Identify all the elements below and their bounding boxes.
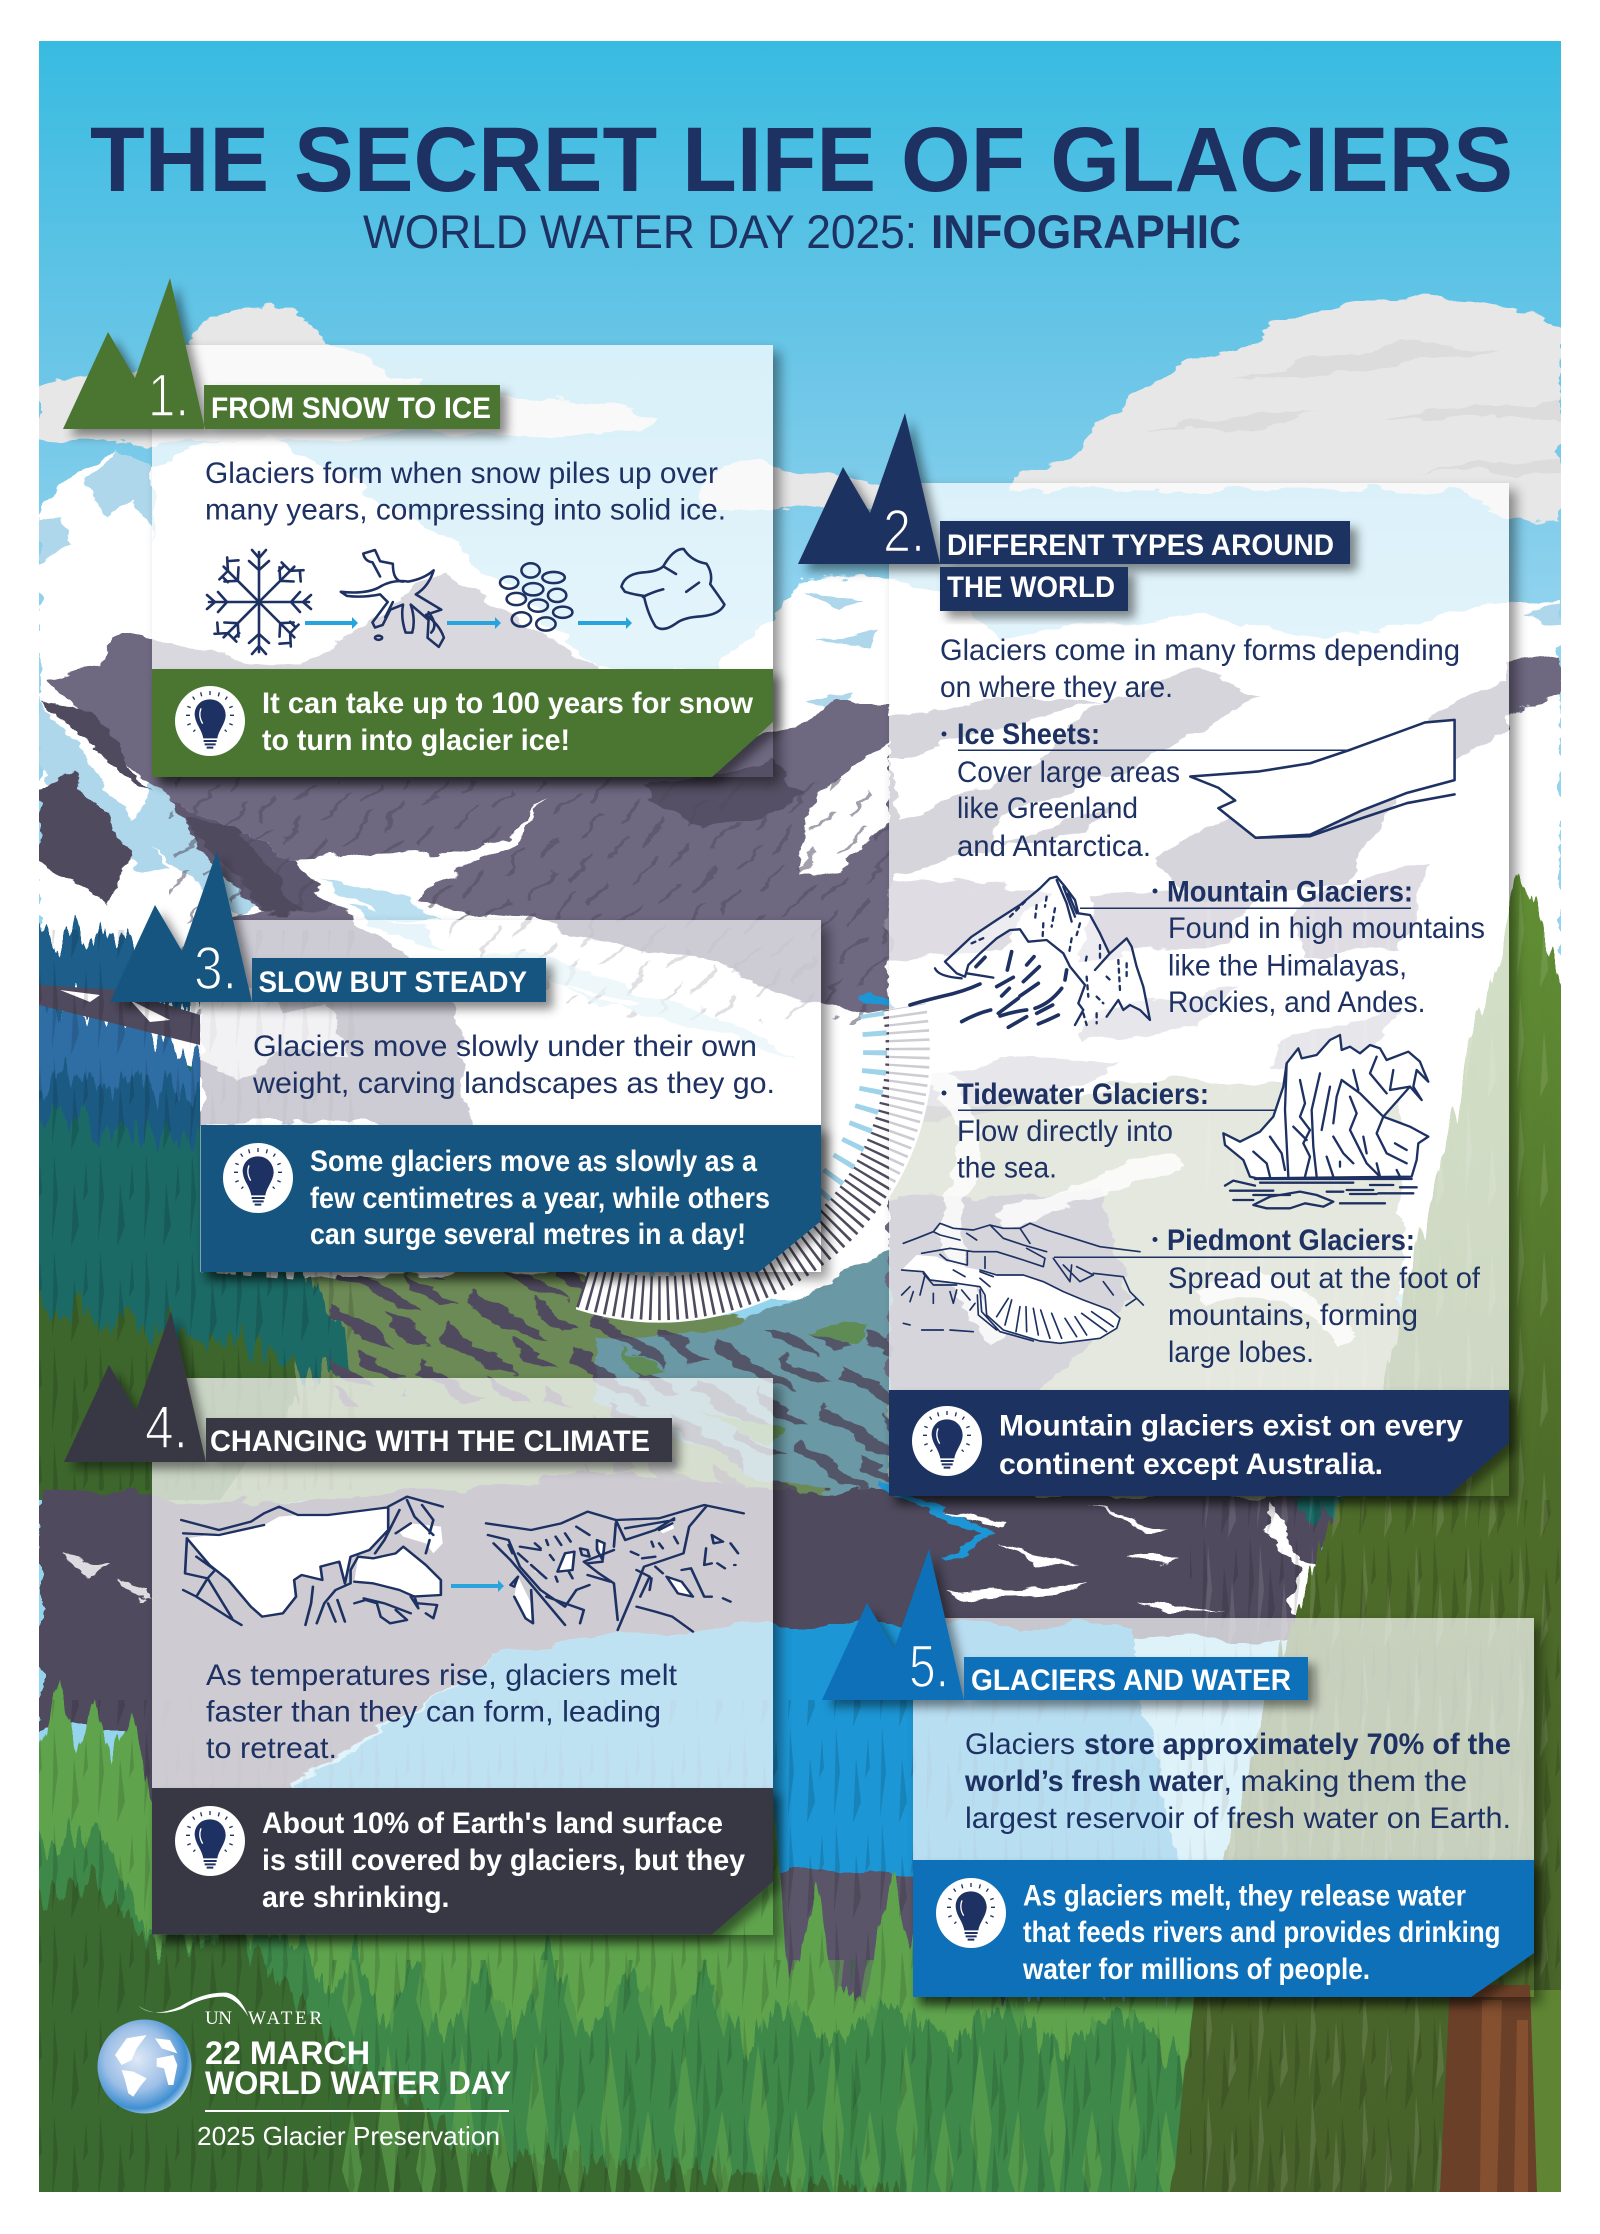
text: mountain glaciers: Found in high mountains [1168, 912, 1485, 945]
heading: section 3 [110, 851, 546, 1002]
arrow [305, 617, 358, 629]
panel: different types [798, 413, 1516, 1503]
icon: piedmont glacier [902, 1223, 1143, 1343]
title: THE SECRET LIFE OF GLACIERS [90, 109, 1513, 211]
tip text: About 10% of Earth's land surface [262, 1807, 723, 1840]
icon: mountain glacier [910, 877, 1150, 1027]
text: theme: 2025 Glacier Preservation [197, 2121, 500, 2151]
text: section 3 body: weight, carving landscapes as they go. [252, 1067, 775, 1100]
icon: firn flake [341, 550, 444, 647]
tip text: It can take up to 100 years for snow [262, 687, 754, 720]
tip band [889, 1390, 1509, 1496]
icon: globe [98, 2020, 192, 2114]
tip text [999, 1410, 1463, 1481]
icon: snowflake [207, 550, 311, 654]
logo: UN Water world water day [98, 1993, 511, 2151]
panel: changing with the climate [64, 1311, 780, 1942]
text: section 4 body [206, 1659, 678, 1765]
arrow [578, 617, 632, 629]
text: section 5 body: , making them the [1224, 1765, 1467, 1798]
heading: section 4 [64, 1311, 672, 1462]
lake [275, 1625, 1180, 1900]
tree trunk [1440, 1985, 1537, 2192]
blue forests [39, 922, 200, 1005]
icon: granules [500, 563, 572, 631]
dark rock [39, 1470, 1340, 1785]
heading: section 1: FROM SNOW TO ICE [211, 392, 491, 425]
teal forest [39, 1105, 350, 1370]
tip text: are shrinking. [262, 1881, 450, 1914]
big tree [1160, 875, 1561, 2234]
tip text [1022, 1880, 1500, 1986]
tip text: is still covered by glaciers, but they [262, 1844, 745, 1877]
heading: section 5: GLACIERS AND WATER [971, 1664, 1291, 1697]
icon: lightbulb [936, 1878, 1006, 1948]
text: tidewater glaciers: Flow directly into [957, 1115, 1173, 1148]
arrow [447, 617, 501, 629]
forest base [39, 1010, 340, 1330]
tip text: water for millions of people. [1022, 1953, 1370, 1986]
icon: ice chunk [621, 549, 724, 629]
valley and green slopes [167, 1272, 832, 1506]
tip text: to turn into glacier ice! [262, 724, 570, 757]
tip text: As glaciers melt, they release water [1023, 1880, 1466, 1912]
tip text: can surge several metres in a day! [310, 1218, 746, 1251]
heading: section 2: THE WORLD [947, 571, 1115, 604]
heading: section 4: 4. [145, 1394, 188, 1461]
text: section 1 body: many years, compressing into solid ice. [205, 494, 726, 526]
rock strokes over valley [330, 1272, 630, 1402]
icon: lightbulb [223, 1143, 293, 1213]
glacier terminal fan [579, 1004, 922, 1312]
text: piedmont glaciers: mountains, forming [1168, 1299, 1418, 1332]
tip text [262, 687, 754, 757]
text: piedmont glaciers: Spread out at the foot of [1168, 1262, 1481, 1295]
glacier [298, 798, 632, 1022]
icon: lightbulb [912, 1406, 982, 1476]
lower left rock [39, 1600, 510, 1840]
text: section 5 body: Glaciers [965, 1728, 1075, 1761]
icon: tidewater glacier [1223, 1035, 1428, 1208]
text: ice sheets: Ice Sheets: [957, 718, 1100, 751]
panel: slow but steady [110, 851, 828, 1279]
text: section 2 intro: on where they are. [940, 671, 1173, 704]
text: tidewater glaciers [942, 1078, 1280, 1184]
tip text [262, 1807, 745, 1914]
tip text [310, 1145, 770, 1251]
moraine teal-grey [590, 1250, 889, 1500]
tip band [152, 669, 773, 777]
text: section 3 body: Glaciers move slowly under their own [253, 1030, 757, 1063]
heading: section 1 [63, 278, 500, 429]
text: section 2 intro: Glaciers come in many forms depending [940, 634, 1460, 667]
text: piedmont glaciers: large lobes. [1168, 1336, 1314, 1369]
tip band [200, 1125, 821, 1272]
text: section 4 body: faster than they can form, leading [206, 1696, 661, 1728]
dark green forest [39, 1300, 300, 1490]
text: ice sheets: and Antarctica. [957, 830, 1151, 863]
icon: ice sheet [1190, 720, 1455, 838]
tip band [152, 1788, 773, 1934]
text: mountain glaciers: Rockies, and Andes. [1168, 986, 1426, 1019]
icon: glacier map after [486, 1505, 744, 1632]
text: section 1 body [205, 457, 726, 526]
text: mountain glaciers: Mountain Glaciers: [1167, 876, 1413, 908]
heading: section 5 [822, 1549, 1308, 1700]
heading: section 2 [798, 413, 1350, 611]
text: mountain glaciers [1080, 876, 1485, 1019]
text: tidewater glaciers: Tidewater Glaciers: [957, 1078, 1209, 1111]
text: ice sheets [942, 718, 1351, 863]
text: section 5 body: largest reservoir of fresh water on Earth. [965, 1802, 1511, 1835]
text: section 4 body: to retreat. [206, 1732, 337, 1765]
icon: lightbulb [175, 1806, 245, 1876]
panel: glaciers and water [822, 1549, 1541, 2004]
text: piedmont glaciers: Piedmont Glaciers: [1167, 1224, 1415, 1257]
subtitle: WORLD WATER DAY 2025: [363, 205, 917, 258]
text: section 3 body [252, 1030, 775, 1100]
heading: section 2: DIFFERENT TYPES AROUND [947, 529, 1334, 562]
text: ice sheets: like Greenland [957, 792, 1138, 825]
text: section 2 intro [940, 634, 1460, 704]
heading: section 2: 2. [883, 498, 925, 564]
text: UN Water: WATER [248, 2008, 322, 2029]
forest [39, 1680, 1194, 2192]
panel: from snow to ice [63, 278, 780, 784]
icon: glacier map before [181, 1497, 443, 1625]
text: UN Water: UN [205, 2008, 232, 2029]
tip text: Some glaciers move as slowly as a [310, 1145, 757, 1178]
text: section 4 body: As temperatures rise, glaciers melt [206, 1659, 678, 1692]
text: UN Water [205, 2008, 322, 2029]
heading: section 1: 1. [148, 362, 189, 429]
purple rock [46, 571, 889, 1020]
heading: section 3: 3. [194, 935, 237, 1002]
text: section 5 body: store approximately 70% of the [1084, 1728, 1511, 1761]
tip text: continent except Australia. [999, 1448, 1383, 1481]
tip text: that feeds rivers and provides drinking [1023, 1916, 1500, 1949]
tip band [913, 1860, 1534, 1997]
text: tidewater glaciers: the sea. [957, 1152, 1057, 1184]
subtitle: INFOGRAPHIC [931, 205, 1241, 258]
subtitle [363, 205, 1241, 258]
clouds [39, 298, 1561, 522]
heading: section 4: CHANGING WITH THE CLIMATE [210, 1425, 650, 1458]
river [876, 1483, 989, 1563]
tip text: Mountain glaciers exist on every [999, 1410, 1463, 1442]
text: section 5 body [964, 1728, 1511, 1835]
arrow [451, 1580, 504, 1592]
text: piedmont glaciers [1054, 1224, 1481, 1369]
text: world water day: WORLD WATER DAY [205, 2065, 511, 2101]
tip text: few centimetres a year, while others [310, 1182, 770, 1215]
heading: section 3: SLOW BUT STEADY [258, 966, 527, 999]
snow mountains [39, 435, 1561, 1300]
text: ice sheets: Cover large areas [957, 756, 1180, 789]
heading: section 5: 5. [909, 1633, 949, 1700]
text: section 5 body: world’s fresh water [964, 1765, 1224, 1798]
icon: lightbulb [175, 686, 245, 756]
icon: swoosh [138, 1993, 248, 2017]
text: section 1 body: Glaciers form when snow piles up over [205, 457, 718, 490]
text: mountain glaciers: like the Himalayas, [1168, 950, 1407, 982]
dark forest base [39, 1320, 300, 1500]
text: date: 22 MARCH [205, 2035, 370, 2071]
